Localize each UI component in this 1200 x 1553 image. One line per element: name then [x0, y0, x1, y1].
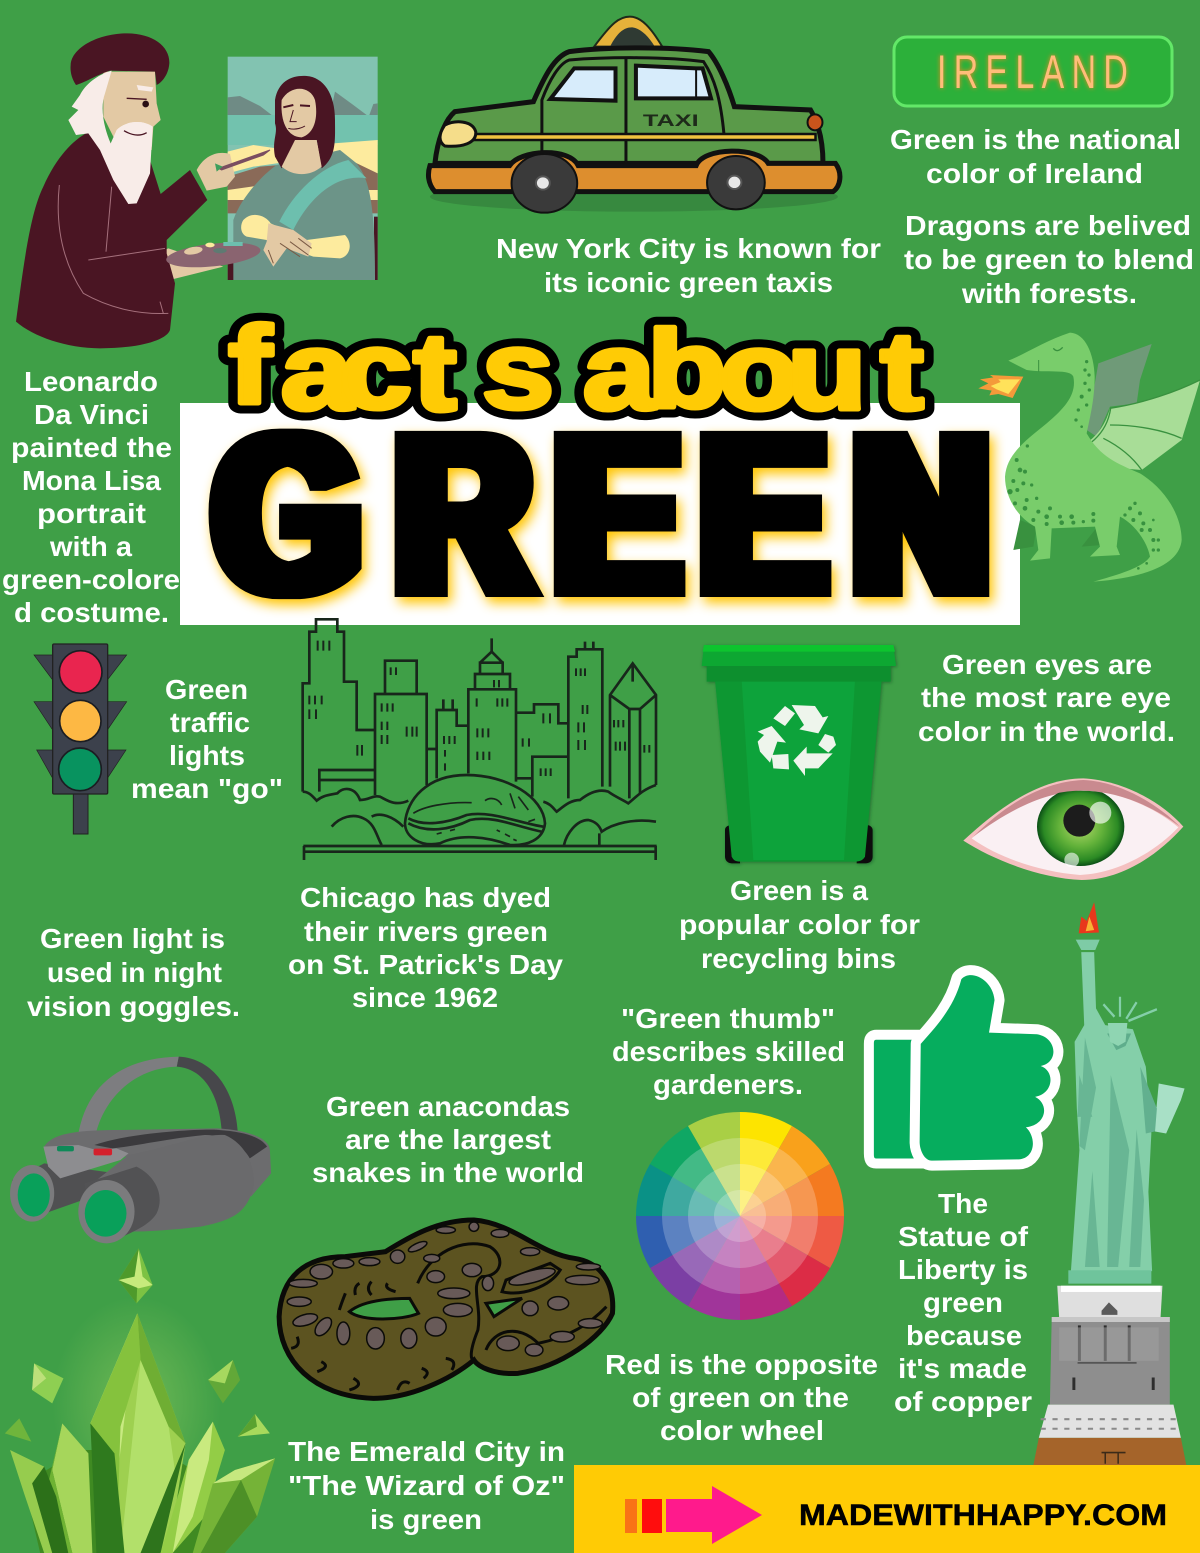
- text: Statue of Liberty fact: it's made: [898, 1353, 1027, 1384]
- text: Statue of Liberty fact: because: [906, 1320, 1022, 1351]
- text: Emerald City fact: "The Wizard of Oz": [288, 1470, 565, 1501]
- illustration: Chicago skyline: [303, 619, 657, 860]
- title line: facts about: facts about: [228, 304, 924, 434]
- text: green thumb fact: describes skilled: [612, 1036, 845, 1067]
- title panel: white box: [180, 403, 1020, 625]
- text: Statue of Liberty fact: [894, 1188, 1032, 1417]
- text: Leonardo fact: green-colore: [2, 564, 180, 595]
- chart: colour wheel: [636, 1112, 844, 1320]
- text: dragons fact: to be green to blend: [904, 244, 1194, 275]
- website text: MADEWITHHAPPY.COM: [799, 1499, 1167, 1532]
- icon: recycling bin: [702, 645, 896, 863]
- text: Chicago fact: on St. Patrick's Day: [288, 949, 563, 980]
- Mona Lisa painting: [228, 57, 378, 280]
- text: night vision fact: vision goggles.: [27, 991, 240, 1022]
- text: red opposite fact: [605, 1349, 878, 1446]
- text: Leonardo fact: [2, 366, 180, 628]
- text: dragons fact: Dragons are belived: [905, 210, 1191, 241]
- text: eyes fact: Green eyes are: [942, 649, 1152, 680]
- text: Chicago fact: their rivers green: [304, 916, 548, 947]
- small floating crystals: [5, 1248, 270, 1442]
- illustration: anaconda: [279, 1220, 613, 1398]
- text: eyes fact: color in the world.: [918, 716, 1175, 747]
- text: green thumb fact: [612, 1003, 845, 1100]
- text: red opposite fact: Red is the opposite: [605, 1349, 878, 1380]
- icon: thumbs up: [874, 975, 1053, 1161]
- text: night vision fact: Green light is: [40, 923, 225, 954]
- text: traffic light fact: mean "go": [131, 773, 283, 804]
- text: Leonardo fact: portrait: [37, 498, 146, 529]
- text: anaconda fact: snakes in the world: [312, 1157, 584, 1188]
- statue figure: [1068, 940, 1185, 1284]
- text: red opposite fact: of green on the: [632, 1382, 849, 1413]
- illustration: Statue of Liberty: [1033, 902, 1186, 1465]
- text: dragons fact: with forests.: [961, 278, 1137, 309]
- illustration: emerald crystals: [5, 1248, 275, 1553]
- title line: facts about: facts about: [228, 304, 924, 434]
- text: green thumb fact: gardeners.: [653, 1069, 803, 1100]
- painter figure: [16, 33, 270, 348]
- text: traffic light fact: lights: [169, 740, 245, 771]
- text: recycling fact: recycling bins: [701, 943, 896, 974]
- illustration: Leonardo painting the Mona Lisa: [16, 33, 378, 348]
- statue pedestal: [1033, 1286, 1186, 1465]
- far wing: [1087, 344, 1152, 437]
- text: Leonardo fact: Da Vinci: [34, 399, 149, 430]
- text: Leonardo fact: d costume.: [14, 597, 169, 628]
- torch flame: [1079, 902, 1099, 933]
- illustration: green NYC taxi: [428, 17, 840, 213]
- text: night vision fact: [27, 923, 240, 1022]
- text: eyes fact: the most rare eye: [921, 682, 1171, 713]
- title: facts about GREEN: [214, 304, 989, 639]
- text: night vision fact: used in night: [47, 957, 222, 988]
- text: Emerald City fact: The Emerald City in: [288, 1436, 565, 1467]
- recycling symbol: [758, 705, 836, 776]
- title line: GREEN: GREEN: [214, 389, 989, 639]
- text: Emerald City fact: [288, 1436, 565, 1535]
- text: Leonardo fact: with a: [49, 531, 132, 562]
- neon Ireland sign: [894, 37, 1172, 106]
- text: traffic light fact: [131, 674, 283, 804]
- text: Chicago fact: Chicago has dyed: [300, 882, 551, 913]
- text: Ireland fact: color of Ireland: [926, 158, 1143, 189]
- text: recycling fact: [679, 875, 920, 974]
- text: Leonardo fact: Leonardo: [24, 366, 158, 397]
- text: dragons fact: [904, 210, 1194, 309]
- text: Ireland fact: [890, 124, 1181, 189]
- text: Statue of Liberty fact: The: [938, 1188, 988, 1219]
- text: Ireland fact: Green is the national: [890, 124, 1181, 155]
- text: Chicago fact: since 1962: [352, 982, 498, 1013]
- text: green thumb fact: "Green thumb": [621, 1003, 835, 1034]
- illustration: night vision goggles: [10, 1057, 271, 1243]
- dragon fire: [978, 375, 1023, 398]
- text: Chicago fact: [288, 882, 563, 1013]
- text: red opposite fact: color wheel: [660, 1415, 824, 1446]
- text: eyes fact: [918, 649, 1175, 747]
- text: taxi fact: New York City is known for: [496, 233, 881, 264]
- text: traffic light fact: Green: [165, 674, 248, 705]
- footer banner: [574, 1465, 1200, 1553]
- text: Statue of Liberty fact: Statue of: [898, 1221, 1029, 1252]
- near wing: [1065, 380, 1200, 470]
- text: anaconda fact: [312, 1091, 584, 1188]
- text: Leonardo fact: Mona Lisa: [22, 465, 161, 496]
- text: Statue of Liberty fact: Liberty is: [898, 1254, 1028, 1285]
- neon Ireland sign: IRELAND: [937, 46, 1128, 98]
- text: Emerald City fact: is green: [370, 1504, 482, 1535]
- text: taxi fact: [496, 233, 881, 298]
- illustration: dragon: [978, 333, 1200, 582]
- text: taxi fact: its iconic green taxis: [544, 267, 833, 298]
- text: anaconda fact: Green anacondas: [326, 1091, 570, 1122]
- dragon spots: [1007, 360, 1160, 570]
- text: Leonardo fact: painted the: [11, 432, 172, 463]
- icon: traffic light: [34, 644, 127, 834]
- text: traffic light fact: traffic: [170, 707, 250, 738]
- text: Statue of Liberty fact: green: [923, 1287, 1003, 1318]
- illustration: green eye: [963, 778, 1183, 880]
- dragon body: [1005, 333, 1182, 582]
- text: recycling fact: popular color for: [679, 909, 920, 940]
- main crystal cluster: [10, 1313, 275, 1553]
- illustration: green NYC taxi: TAXI: [643, 112, 699, 130]
- arrow icon: [625, 1486, 762, 1544]
- text: recycling fact: Green is a: [730, 875, 868, 906]
- text: anaconda fact: are the largest: [345, 1124, 551, 1155]
- text: Statue of Liberty fact: of copper: [894, 1386, 1032, 1417]
